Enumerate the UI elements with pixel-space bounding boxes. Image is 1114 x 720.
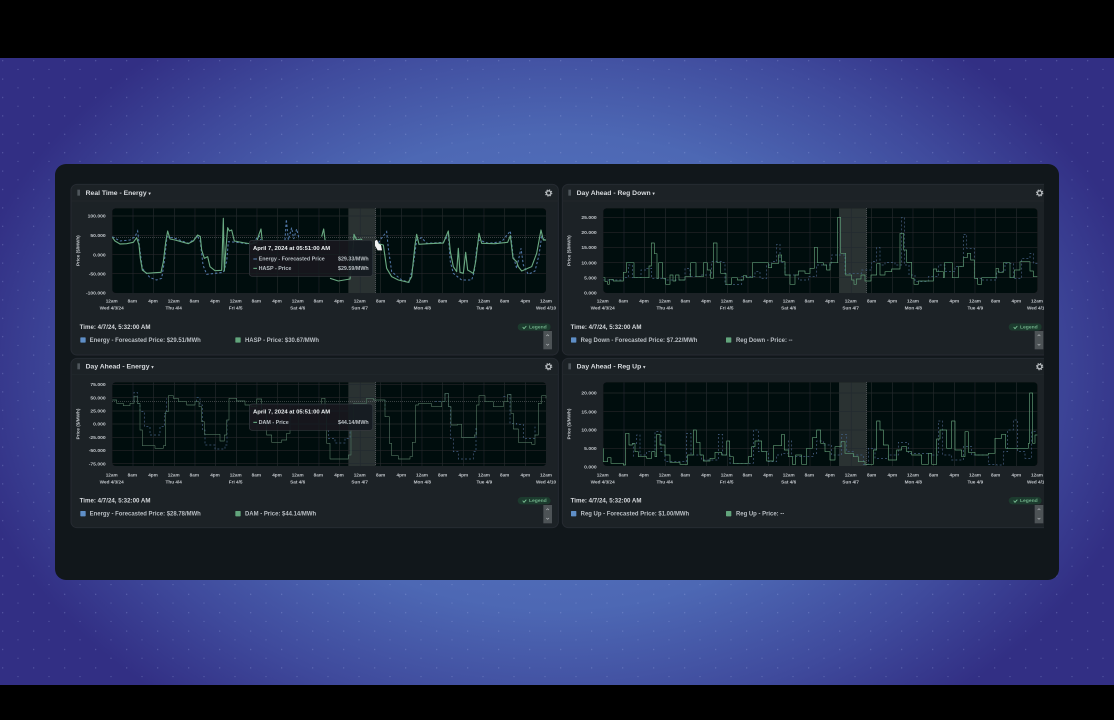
legend toggle bbox=[518, 323, 551, 331]
x axis ticks: 4pm bbox=[639, 299, 649, 304]
x axis ticks: 4pm bbox=[459, 472, 468, 477]
x axis ticks: Tue 4/9 bbox=[967, 306, 984, 311]
x axis ticks: 12am bbox=[1031, 299, 1043, 304]
legend item: forecasted: Energy - Forecasted Price: $28.78/MWh bbox=[90, 512, 201, 518]
tooltip: $44.14/MWh bbox=[338, 420, 369, 426]
x axis ticks: Sat 4/6 bbox=[290, 479, 306, 484]
chart: real time energy prices bbox=[112, 208, 546, 293]
legend toggle: Legend bbox=[1020, 498, 1038, 504]
x axis ticks: 12am bbox=[416, 299, 428, 304]
x axis ticks: 8am bbox=[376, 472, 385, 477]
y axis ticks: -25.000 bbox=[89, 435, 106, 441]
tooltip: DAM - Price bbox=[259, 420, 289, 426]
legend scroller bbox=[543, 331, 552, 349]
x axis ticks: Tue 4/9 bbox=[476, 479, 493, 484]
x axis ticks: 12am bbox=[907, 472, 919, 477]
y axis ticks: 75.000 bbox=[90, 382, 106, 388]
x axis ticks: Wed 4/3/24 bbox=[591, 479, 615, 484]
x axis ticks: Sat 4/6 bbox=[781, 306, 797, 311]
tooltip: Energy - Forecasted Price bbox=[259, 257, 325, 263]
x axis ticks: 8am bbox=[252, 299, 261, 304]
y axis ticks bbox=[581, 215, 597, 297]
legend toggle: Legend bbox=[1020, 324, 1038, 330]
x axis ticks bbox=[590, 300, 1044, 310]
x axis ticks: 12am bbox=[845, 472, 857, 477]
x axis ticks: Wed 4/3/24 bbox=[100, 306, 124, 311]
panel: Day Ahead - Energy bbox=[71, 358, 558, 528]
y axis ticks bbox=[89, 382, 106, 467]
x axis ticks: 12am bbox=[845, 299, 857, 304]
x axis ticks: 12am bbox=[416, 472, 428, 477]
x axis ticks: 4pm bbox=[701, 472, 711, 477]
y axis ticks: 5.000 bbox=[584, 446, 597, 452]
chart: reg down prices bbox=[603, 208, 1037, 293]
x axis ticks: 4pm bbox=[521, 472, 530, 477]
y axis ticks: 50.000 bbox=[90, 395, 106, 401]
legend item: actual: HASP - Price: $30.67/MWh bbox=[245, 338, 319, 344]
drag handle bbox=[568, 190, 571, 196]
x axis ticks: 4pm bbox=[825, 472, 835, 477]
x axis ticks: 8am bbox=[619, 299, 628, 304]
y axis ticks: 10.000 bbox=[581, 260, 597, 266]
x axis ticks: 12am bbox=[478, 299, 490, 304]
y axis title: Price ($/MWh) bbox=[76, 235, 81, 266]
y axis ticks: -100.000 bbox=[86, 291, 106, 297]
x axis ticks: Mon 4/8 bbox=[414, 479, 431, 484]
legend item: forecasted: Energy - Forecasted Price: $29.51/MWh bbox=[90, 338, 201, 344]
y axis ticks: -50.000 bbox=[89, 271, 106, 277]
x axis ticks: 8am bbox=[314, 472, 323, 477]
tooltip: $29.59/MWh bbox=[338, 266, 369, 272]
x axis ticks: 4pm bbox=[763, 299, 773, 304]
x axis ticks: 12am bbox=[969, 472, 981, 477]
y axis ticks: 25.000 bbox=[581, 215, 597, 221]
y axis ticks: 0.000 bbox=[584, 464, 597, 470]
x axis ticks: 12am bbox=[230, 472, 242, 477]
x axis ticks: Sun 4/7 bbox=[351, 306, 368, 311]
x axis ticks: 12am bbox=[721, 299, 733, 304]
panel: Real Time - Energy bbox=[71, 184, 558, 355]
x axis ticks: Sat 4/6 bbox=[781, 479, 797, 484]
chart: reg up prices bbox=[603, 382, 1037, 466]
x axis ticks: 12am bbox=[783, 472, 795, 477]
x axis ticks: 12am bbox=[168, 299, 180, 304]
x axis ticks bbox=[590, 474, 1044, 484]
tooltip bbox=[249, 404, 373, 430]
x axis ticks: 8am bbox=[743, 472, 752, 477]
tooltip: April 7, 2024 at 05:51:00 AM bbox=[253, 246, 330, 252]
x axis ticks: Mon 4/8 bbox=[414, 306, 431, 311]
x axis ticks: 12am bbox=[721, 472, 733, 477]
x axis ticks: 8am bbox=[190, 299, 199, 304]
x axis ticks: Fri 4/5 bbox=[229, 479, 243, 484]
legend item: actual: DAM - Price: $44.14/MWh bbox=[245, 512, 316, 518]
icon: settings gear bbox=[1036, 363, 1043, 370]
x axis ticks: 8am bbox=[867, 472, 876, 477]
x axis ticks: 4pm bbox=[950, 472, 959, 477]
x axis ticks: Sun 4/7 bbox=[351, 479, 368, 484]
y axis ticks: 0.000 bbox=[584, 291, 597, 297]
x axis ticks: 12am bbox=[1031, 472, 1043, 477]
x axis ticks: 4pm bbox=[272, 299, 282, 304]
x axis ticks bbox=[100, 472, 556, 484]
x axis ticks: 8am bbox=[376, 299, 385, 304]
x axis ticks: Sun 4/7 bbox=[842, 479, 859, 484]
legend item: forecasted: Reg Up - Forecasted Price: $1.00/MWh bbox=[581, 512, 690, 518]
icon: settings gear bbox=[545, 363, 552, 370]
x axis ticks: 8am bbox=[500, 472, 509, 477]
x axis ticks: 12am bbox=[106, 472, 118, 477]
x axis ticks: Wed 4/3/24 bbox=[591, 306, 615, 311]
x axis ticks: Sun 4/7 bbox=[842, 306, 859, 311]
x axis ticks: 12am bbox=[907, 299, 919, 304]
drag handle bbox=[77, 190, 80, 196]
x axis ticks: 8am bbox=[991, 472, 1000, 477]
tooltip: HASP - Price bbox=[259, 266, 291, 272]
x axis ticks: 4pm bbox=[334, 472, 344, 477]
panel: Day Ahead - Reg Up bbox=[562, 358, 1062, 528]
x axis ticks: 8am bbox=[681, 299, 690, 304]
x axis ticks: 12am bbox=[168, 472, 180, 477]
legend scroller bbox=[1035, 505, 1043, 523]
y axis ticks: 15.000 bbox=[581, 409, 597, 415]
x axis ticks: 4pm bbox=[272, 472, 282, 477]
x axis ticks: 8am bbox=[252, 472, 261, 477]
x axis ticks: 4pm bbox=[148, 299, 158, 304]
x axis ticks: Fri 4/5 bbox=[720, 479, 734, 484]
icon: settings gear bbox=[545, 190, 552, 196]
y axis ticks: 5.000 bbox=[584, 275, 597, 281]
legend toggle bbox=[1009, 497, 1042, 504]
y axis ticks: 100.000 bbox=[88, 214, 106, 220]
x axis ticks: 4pm bbox=[825, 299, 835, 304]
x axis ticks: Fri 4/5 bbox=[229, 306, 243, 311]
y axis ticks: 25.000 bbox=[90, 409, 106, 415]
x axis ticks: Mon 4/8 bbox=[905, 306, 922, 311]
legend toggle bbox=[1009, 323, 1042, 331]
x axis ticks: Wed 4/10 bbox=[1027, 479, 1047, 484]
x axis ticks: Tue 4/9 bbox=[967, 479, 984, 484]
drag handle bbox=[568, 363, 571, 369]
chart: day ahead energy prices bbox=[112, 382, 546, 466]
x axis ticks: 12am bbox=[478, 472, 490, 477]
legend item: actual: Reg Down - Price: -- bbox=[736, 338, 793, 344]
icon: settings gear bbox=[1036, 190, 1043, 196]
y axis ticks: 10.000 bbox=[581, 428, 597, 434]
x axis ticks: 12am bbox=[783, 299, 795, 304]
x axis ticks: 12am bbox=[106, 299, 118, 304]
y axis ticks bbox=[581, 391, 597, 470]
x axis ticks: 8am bbox=[743, 299, 752, 304]
x axis ticks: Wed 4/10 bbox=[536, 479, 556, 484]
x axis ticks: 12am bbox=[354, 472, 366, 477]
legend scroller bbox=[1035, 331, 1043, 349]
x axis ticks: 8am bbox=[438, 472, 447, 477]
x axis ticks: 8am bbox=[128, 299, 137, 304]
tooltip: $29.33/MWh bbox=[338, 257, 369, 263]
x axis ticks: Thu 4/4 bbox=[166, 479, 182, 484]
y axis ticks: 15.000 bbox=[581, 245, 597, 251]
x axis ticks: 8am bbox=[190, 472, 199, 477]
y axis ticks: 50.000 bbox=[90, 233, 106, 239]
x axis ticks: 4pm bbox=[701, 299, 711, 304]
x axis ticks: 4pm bbox=[1012, 472, 1021, 477]
drag handle bbox=[77, 363, 80, 369]
x axis ticks: 8am bbox=[805, 472, 814, 477]
x axis ticks: 8am bbox=[991, 299, 1000, 304]
x axis ticks: 12am bbox=[597, 472, 609, 477]
legend scroller bbox=[543, 505, 552, 523]
legend toggle: Legend bbox=[529, 324, 547, 330]
x axis ticks: 12am bbox=[540, 472, 552, 477]
x axis ticks: 12am bbox=[659, 299, 671, 304]
x axis ticks: 4pm bbox=[763, 472, 773, 477]
y axis title: Price ($/MWh) bbox=[567, 235, 572, 266]
dashboard container bbox=[55, 164, 1059, 580]
x axis ticks: 4pm bbox=[521, 299, 530, 304]
tooltip: April 7, 2024 at 05:51:00 AM bbox=[253, 409, 330, 415]
x axis ticks: 8am bbox=[314, 299, 323, 304]
x axis ticks: 8am bbox=[929, 299, 938, 304]
x axis ticks: 12am bbox=[292, 472, 304, 477]
icon: hand cursor bbox=[375, 240, 382, 250]
y axis ticks: -50.000 bbox=[89, 448, 106, 454]
x axis ticks: Thu 4/4 bbox=[657, 479, 673, 484]
x axis ticks: 8am bbox=[805, 299, 814, 304]
time readout: Time: 4/7/24, 5:32:00 AM bbox=[571, 324, 642, 331]
time readout: Time: 4/7/24, 5:32:00 AM bbox=[80, 324, 151, 331]
x axis ticks: 12am bbox=[230, 299, 242, 304]
x axis ticks: Wed 4/10 bbox=[536, 306, 556, 311]
time readout: Time: 4/7/24, 5:32:00 AM bbox=[571, 498, 642, 505]
x axis ticks: 4pm bbox=[210, 299, 220, 304]
x axis ticks: 12am bbox=[597, 299, 609, 304]
panel: Day Ahead - Reg Down bbox=[562, 184, 1062, 355]
x axis ticks: 4pm bbox=[888, 472, 897, 477]
x axis ticks: 12am bbox=[969, 299, 981, 304]
heading: Day Ahead - Energy ▾ bbox=[86, 364, 154, 371]
x axis ticks: 4pm bbox=[210, 472, 220, 477]
y axis ticks: 20.000 bbox=[581, 230, 597, 236]
legend item: actual bbox=[726, 511, 784, 517]
x axis ticks: Tue 4/9 bbox=[476, 306, 493, 311]
x axis ticks: 12am bbox=[354, 299, 366, 304]
x axis ticks: 4pm bbox=[397, 299, 406, 304]
x axis ticks: 4pm bbox=[888, 299, 897, 304]
x axis ticks: 8am bbox=[438, 299, 447, 304]
tooltip bbox=[249, 240, 373, 276]
x axis ticks: 4pm bbox=[950, 299, 959, 304]
y axis ticks bbox=[86, 214, 106, 297]
x axis ticks bbox=[100, 299, 556, 311]
x axis ticks: 4pm bbox=[459, 299, 468, 304]
x axis ticks: 12am bbox=[659, 472, 671, 477]
x axis ticks: Wed 4/3/24 bbox=[100, 479, 124, 484]
y axis title: Price ($/MWh) bbox=[76, 408, 81, 439]
legend item: forecasted: Reg Down - Forecasted Price: $7.22/MWh bbox=[581, 338, 698, 344]
x axis ticks: 8am bbox=[681, 472, 690, 477]
x axis ticks: Thu 4/4 bbox=[657, 306, 673, 311]
heading: Day Ahead - Reg Up ▾ bbox=[577, 364, 646, 371]
x axis ticks: 12am bbox=[540, 299, 552, 304]
x axis ticks: Thu 4/4 bbox=[166, 306, 182, 311]
x axis ticks: 4pm bbox=[148, 472, 158, 477]
heading: Day Ahead - Reg Down ▾ bbox=[577, 190, 656, 197]
x axis ticks: 4pm bbox=[639, 472, 649, 477]
x axis ticks: 4pm bbox=[1012, 299, 1021, 304]
x axis ticks: 12am bbox=[292, 299, 304, 304]
x axis ticks: 8am bbox=[867, 299, 876, 304]
legend toggle: Legend bbox=[529, 498, 547, 504]
x axis ticks: 4pm bbox=[397, 472, 406, 477]
y axis ticks: -75.000 bbox=[89, 461, 106, 467]
x axis ticks: Sat 4/6 bbox=[290, 306, 306, 311]
x axis ticks: Fri 4/5 bbox=[720, 306, 734, 311]
x axis ticks: 4pm bbox=[334, 299, 344, 304]
y axis ticks: 20.000 bbox=[581, 391, 597, 397]
x axis ticks: 8am bbox=[128, 472, 137, 477]
x axis ticks: 8am bbox=[929, 472, 938, 477]
heading: Real Time - Energy ▾ bbox=[86, 190, 151, 197]
time readout: Time: 4/7/24, 5:32:00 AM bbox=[80, 498, 151, 505]
x axis ticks: 8am bbox=[619, 472, 628, 477]
x axis ticks: Mon 4/8 bbox=[905, 479, 922, 484]
y axis ticks: 0.000 bbox=[93, 252, 106, 258]
legend item: actual: Reg Up - Price: -- bbox=[736, 512, 784, 518]
y axis ticks: 0.000 bbox=[93, 422, 106, 428]
x axis ticks: 8am bbox=[500, 299, 509, 304]
x axis ticks: Wed 4/10 bbox=[1027, 306, 1047, 311]
legend toggle bbox=[518, 497, 551, 504]
y axis title: Price ($/MWh) bbox=[567, 408, 572, 439]
